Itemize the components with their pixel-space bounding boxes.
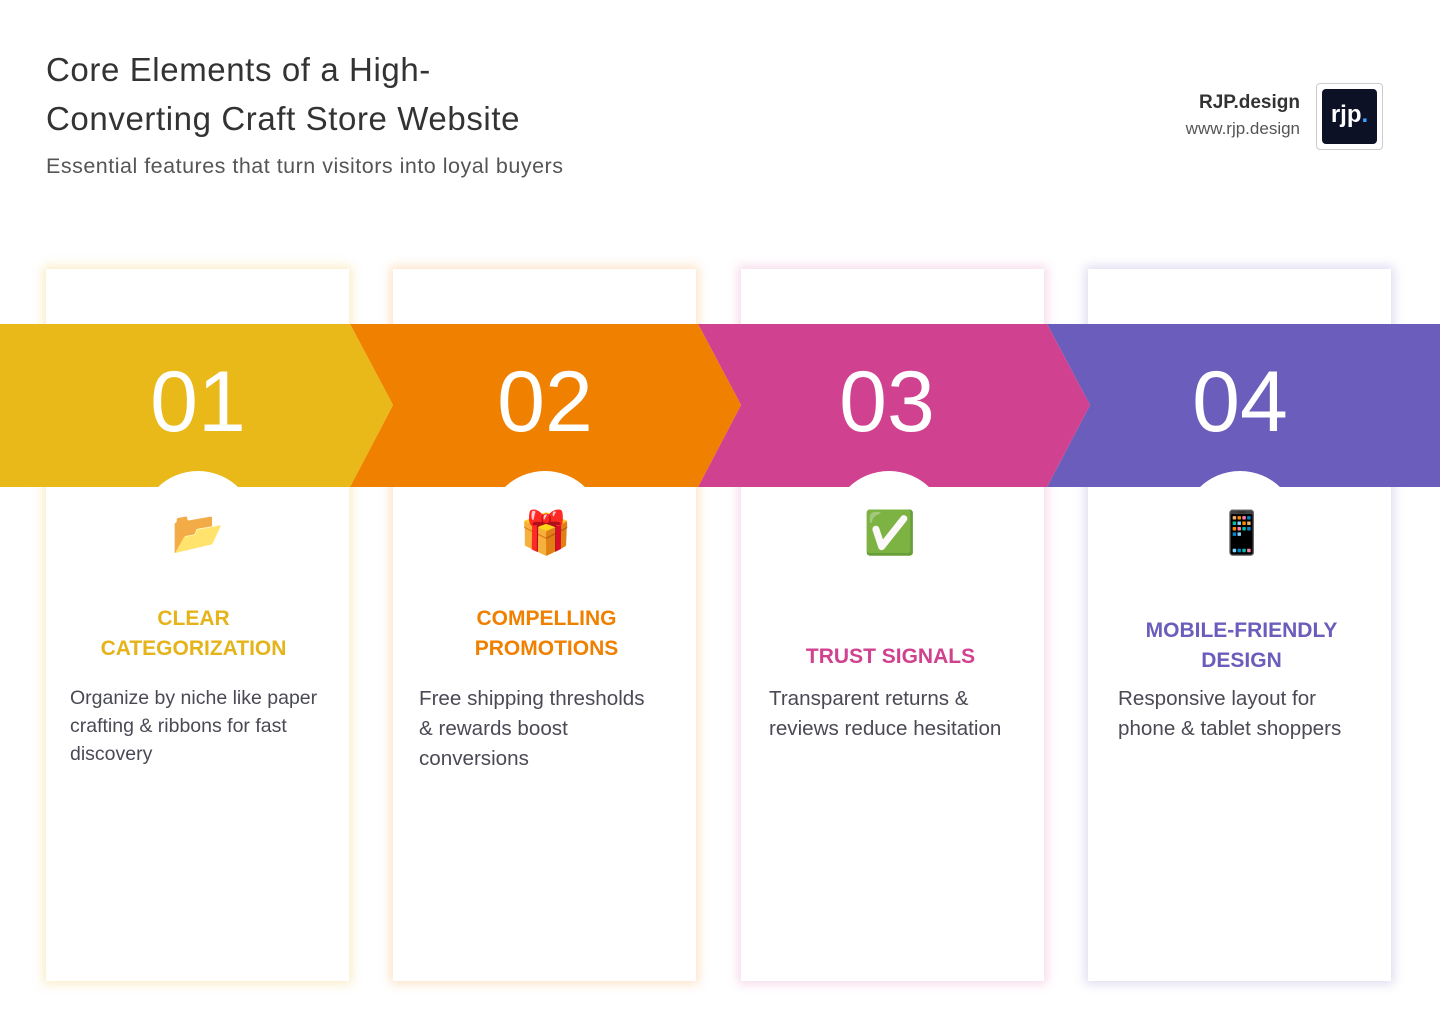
heading 1: CATEGORIZATION — [101, 637, 286, 660]
numbers: 01 — [150, 354, 246, 450]
arrow band — [0, 324, 1440, 487]
heading 4: MOBILE-FRIENDLY — [1146, 619, 1337, 642]
circles — [140, 471, 256, 587]
heading 4 — [1146, 619, 1337, 672]
card 4 — [1088, 269, 1391, 981]
heading 2: PROMOTIONS — [475, 637, 618, 660]
icon: check: ✅ — [864, 509, 916, 558]
text: 04 — [1192, 354, 1288, 450]
text 2: Free shipping thresholds & rewards boost conversions — [419, 687, 645, 770]
heading 4: DESIGN — [1201, 649, 1282, 672]
brand: RJP.design — [1199, 92, 1300, 113]
icon: phone: 📱 — [1216, 509, 1268, 558]
heading 1: CLEAR — [157, 607, 230, 630]
subtitle: Essential features that turn visitors into loyal buyers — [46, 154, 563, 178]
heading 1 — [101, 607, 286, 660]
heading 2: COMPELLING — [476, 607, 616, 630]
text 1: Organize by niche like paper crafting & ribbons for fast discovery — [70, 687, 317, 765]
title: Converting Craft Store Website — [46, 100, 520, 137]
text 3: Transparent returns & reviews reduce hesitation — [769, 687, 1001, 740]
text: 03 — [839, 354, 935, 450]
icon: folder: 📂 — [172, 509, 224, 558]
card 2 — [393, 269, 696, 981]
heading 2 — [475, 607, 618, 660]
logo: rjp. — [1331, 101, 1368, 128]
card 3 — [741, 269, 1044, 981]
text 4: Responsive layout for phone & tablet shoppers — [1118, 687, 1341, 740]
logo — [1316, 83, 1383, 150]
text: 02 — [497, 354, 593, 450]
card 1 — [46, 269, 349, 981]
heading 3: TRUST SIGNALS — [806, 645, 975, 668]
title: Core Elements of a High- — [46, 51, 431, 88]
title — [46, 51, 520, 137]
brand — [1186, 92, 1300, 138]
icon: gift: 🎁 — [520, 509, 572, 558]
brand: www.rjp.design — [1186, 119, 1300, 138]
